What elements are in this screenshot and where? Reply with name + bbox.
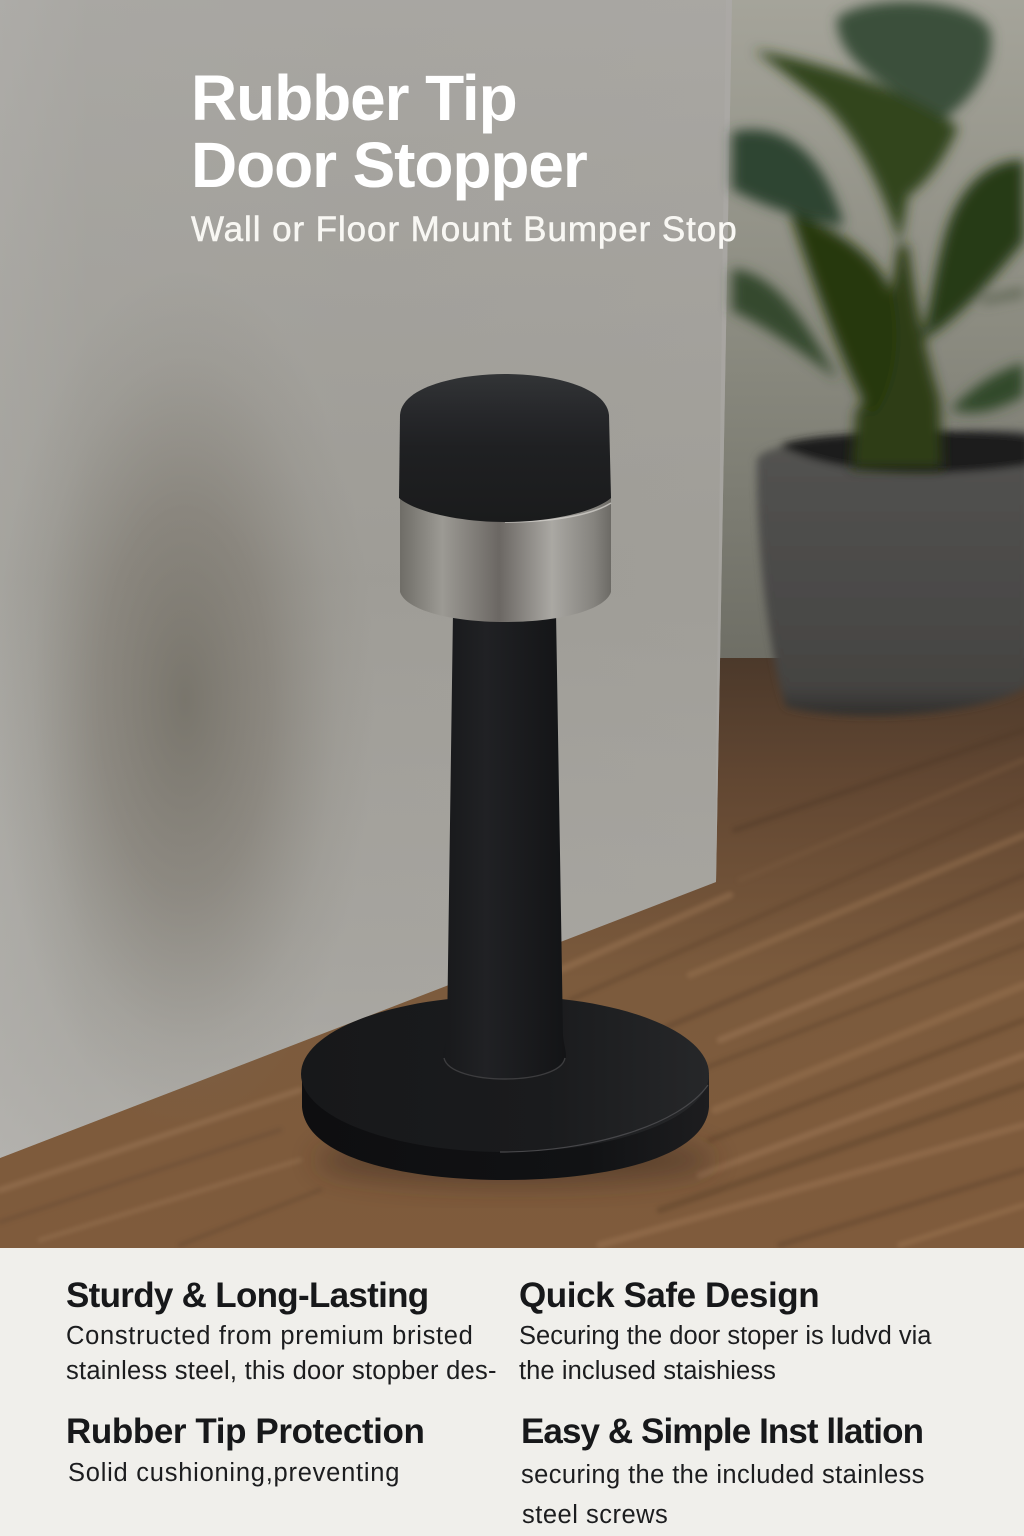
heading: rubber tip: Rubber Tip Protection xyxy=(66,1412,424,1451)
back leaf xyxy=(837,2,991,118)
stopper post xyxy=(443,612,566,1079)
right leaves xyxy=(922,160,1024,340)
panel: features xyxy=(0,1248,1024,1536)
wood floor xyxy=(0,658,1024,1250)
text: quick safe xyxy=(519,1322,932,1385)
text: rubber tip: Solid cushioning,preventing xyxy=(68,1459,400,1487)
left leaves xyxy=(732,130,844,226)
text: easy install: steel screws xyxy=(522,1501,668,1529)
title xyxy=(191,62,587,201)
text: sturdy: Constructed from premium bristed xyxy=(66,1322,474,1350)
subtitle: Wall or Floor Mount Bumper Stop xyxy=(191,210,738,249)
door panel xyxy=(0,0,732,1158)
text: easy install: securing the the included stainless xyxy=(521,1461,925,1489)
text: easy install xyxy=(521,1461,925,1529)
steel collar xyxy=(400,498,611,622)
plant pot xyxy=(757,429,1024,716)
heading: sturdy: Sturdy & Long-Lasting xyxy=(66,1276,428,1315)
rubber tip xyxy=(399,374,611,522)
title: Door Stopper xyxy=(191,129,587,201)
title: Rubber Tip xyxy=(191,62,517,134)
stem xyxy=(852,245,942,468)
plant xyxy=(732,2,1024,468)
text: quick safe: the inclused staishiess xyxy=(519,1357,776,1385)
background wall xyxy=(700,0,1024,664)
heading: quick safe: Quick Safe Design xyxy=(519,1276,819,1315)
middle leaf xyxy=(790,212,896,418)
top leaf xyxy=(754,50,958,245)
heading: easy install: Easy & Simple Inst llation xyxy=(521,1412,923,1451)
door stopper xyxy=(301,374,715,1184)
text: quick safe: Securing the door stoper is ludvd via xyxy=(519,1322,931,1350)
text: sturdy: stainless steel, this door stopber des- xyxy=(66,1357,497,1385)
text: sturdy xyxy=(66,1322,497,1385)
stopper base xyxy=(301,996,715,1184)
